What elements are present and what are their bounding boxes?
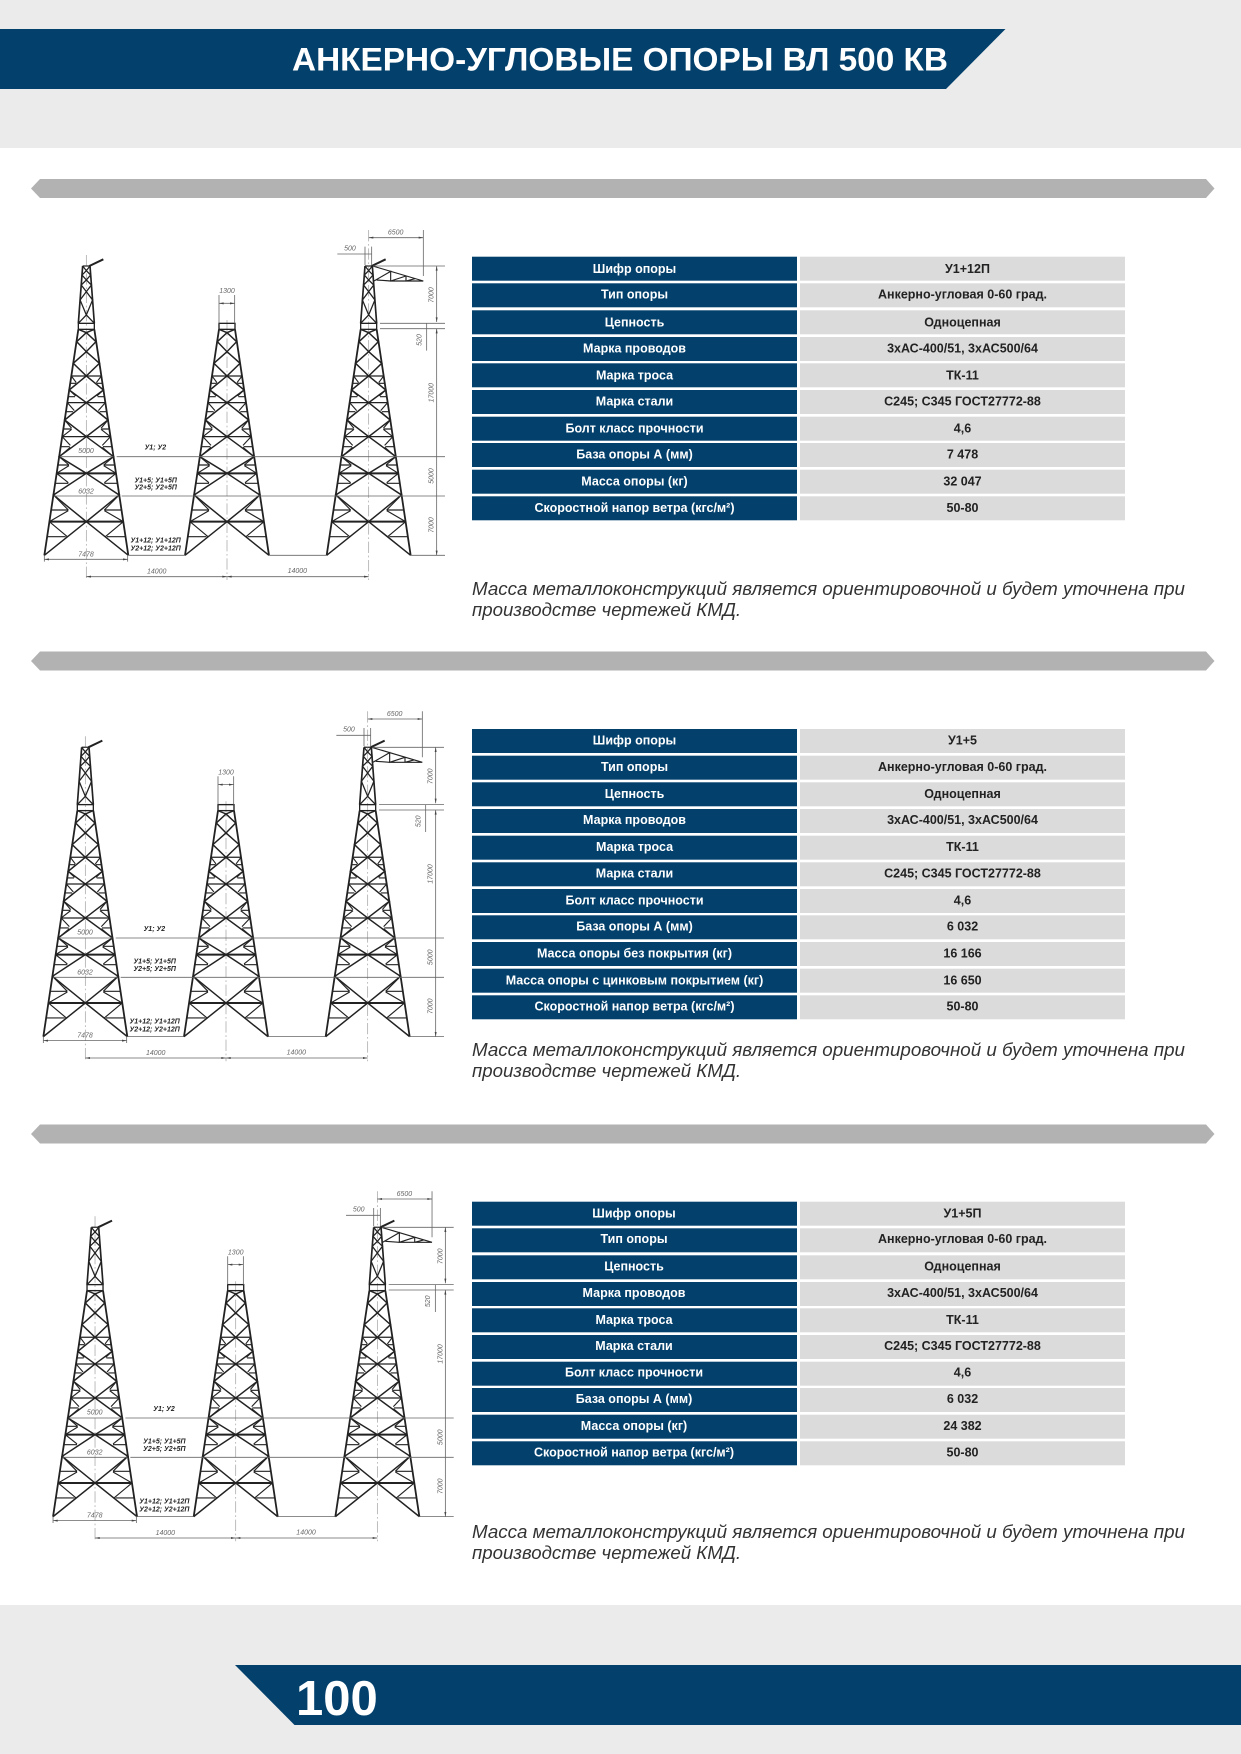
- footer band background: [0, 1605, 1241, 1754]
- tower drawing 1: 7000: [429, 287, 436, 303]
- row: Марка проводов: Марка проводов: [583, 813, 686, 827]
- row: Марка стали: Марка стали: [596, 866, 673, 880]
- tower drawing 1: У1; У2: [145, 445, 166, 452]
- title banner: [0, 29, 1006, 89]
- row: Тип опоры: Тип опоры: [601, 288, 668, 302]
- row: Марка проводов: [472, 337, 1125, 361]
- row: Скоростной напор ветра: 50-80: [947, 1000, 979, 1014]
- row: Цепность: Одноцепная: [924, 1260, 1001, 1274]
- tower drawing 2: 7478: [77, 1033, 93, 1040]
- specification table 2: [472, 729, 1125, 1019]
- tower drawing 2: У1+12; У1+12П: [130, 1019, 181, 1026]
- tower drawing 1: У2+12; У2+12П: [131, 545, 182, 552]
- tower drawing 3: 5000: [437, 1429, 444, 1445]
- tower drawing 1: [44, 230, 445, 580]
- row: Марка троса: [472, 836, 1125, 860]
- tower drawing 3: У1; У2: [153, 1406, 175, 1413]
- row: Цепность: [472, 1255, 1125, 1279]
- row: Тип опоры: Анкерно-угловая 0-60 град.: [878, 1232, 1047, 1246]
- tower drawing 1: 14000: [288, 568, 307, 575]
- row: Марка троса: ТК-11: [946, 840, 979, 854]
- tower drawing 3: 6032: [87, 1450, 103, 1457]
- panel: section 1, tower У1+12П: [31, 179, 1214, 620]
- note 1: Масса металлоконструкций является ориентировочной и будет уточнена при: [472, 578, 1185, 599]
- section divider bar 2: [31, 652, 1214, 670]
- tower drawing 1: 500: [344, 245, 356, 252]
- row: Марка стали: Марка стали: [596, 394, 673, 408]
- tower drawing 3: 5000: [87, 1409, 103, 1416]
- row: Тип опоры: [472, 756, 1125, 780]
- tower drawing 2: У1+5; У1+5П: [133, 959, 177, 966]
- tower drawing 2: 7000: [428, 768, 435, 784]
- row: Тип опоры: Тип опоры: [601, 760, 668, 774]
- row: Марка троса: ТК-11: [946, 1313, 979, 1327]
- note 1: производстве чертежей КМД.: [472, 599, 741, 620]
- row: Шифр опоры: У1+5П: [944, 1206, 981, 1220]
- row: Скоростной напор ветра: [472, 995, 1125, 1019]
- row: Скоростной напор ветра: 50-80: [947, 501, 979, 515]
- tower drawing 2: 520: [415, 815, 422, 827]
- tower drawing 2: 14000: [146, 1050, 165, 1057]
- row: Тип опоры: [472, 1228, 1125, 1252]
- tower drawing 2: 14000: [287, 1049, 306, 1056]
- row: Шифр опоры: У1+5: [948, 734, 977, 748]
- row: База опоры А: 6 032: [947, 1392, 978, 1406]
- row: Марка проводов: Марка проводов: [583, 1286, 686, 1300]
- tower drawing 2: 1300: [218, 769, 234, 776]
- row: База опоры А: База опоры А (мм): [576, 1392, 692, 1406]
- row: Марка троса: [472, 363, 1125, 387]
- row: База опоры А: [472, 443, 1125, 467]
- tower drawing 2: У2+5; У2+5П: [133, 966, 177, 973]
- row: Скоростной напор ветра: Скоростной напор ветра (кгс/м²): [534, 1000, 735, 1014]
- row: Тип опоры: Тип опоры: [600, 1232, 668, 1246]
- tower drawing 3: У2+5; У2+5П: [143, 1446, 187, 1453]
- tower drawing 1: 7000: [429, 517, 436, 533]
- row: Болт класс прочности: 4,6: [954, 421, 971, 435]
- row: Скоростной напор ветра: Скоростной напор ветра (кгс/м²): [534, 1446, 734, 1460]
- row: Шифр опоры: Шифр опоры: [593, 734, 676, 748]
- panel: section 3, tower У1+5П: [31, 1124, 1214, 1563]
- tower drawing 3: 6500: [397, 1191, 412, 1198]
- tower drawing 1: 5000: [429, 468, 436, 484]
- tower drawing 2: 6500: [387, 711, 403, 718]
- tower drawing 1: 1300: [219, 288, 235, 295]
- tower drawing 3: У1+12; У1+12П: [139, 1499, 190, 1506]
- tower drawing 3: 1300: [228, 1249, 244, 1256]
- tower drawing 3: [53, 1191, 454, 1541]
- row: Масса опоры: [472, 470, 1125, 494]
- tower drawing 2: 5000: [428, 949, 435, 965]
- row: Шифр опоры: [472, 729, 1125, 753]
- row: Марка стали: С245; С345 ГОСТ27772-88: [884, 866, 1041, 880]
- row: Цепность: Цепность: [605, 787, 665, 801]
- tower drawing 2: 17000: [428, 864, 435, 884]
- row: Масса опоры с цинковым покрытием: [472, 969, 1125, 993]
- tower drawing 1: 14000: [147, 569, 166, 576]
- row: Масса опоры с цинковым покрытием: Масса опоры с цинковым покрытием (кг): [506, 974, 763, 988]
- section divider bar 3: [31, 1124, 1214, 1144]
- tower drawing 1: У1+12; У1+12П: [131, 537, 182, 544]
- row: Марка проводов: Марка проводов: [583, 341, 686, 355]
- tower drawing 3: У1+5; У1+5П: [143, 1439, 187, 1446]
- row: База опоры А: [472, 1388, 1125, 1412]
- row: Шифр опоры: У1+12П: [945, 262, 990, 276]
- page number: 100: [296, 1672, 378, 1726]
- panel: section 2, tower У1+5: [31, 652, 1214, 1081]
- row: Шифр опоры: Шифр опоры: [593, 262, 676, 276]
- tower drawing 3: 14000: [156, 1530, 175, 1537]
- tower drawing 2: [43, 711, 444, 1061]
- row: Шифр опоры: [472, 1202, 1125, 1226]
- tower drawing 2: У1; У2: [144, 926, 165, 933]
- row: Скоростной напор ветра: Скоростной напор ветра (кгс/м²): [534, 501, 735, 515]
- row: Тип опоры: Анкерно-угловая 0-60 град.: [878, 760, 1047, 774]
- row: Марка троса: [472, 1308, 1125, 1332]
- row: Марка троса: Марка троса: [596, 840, 674, 854]
- tower drawing 1: 6032: [78, 488, 94, 495]
- tower drawing 3: 17000: [437, 1344, 444, 1364]
- tower drawing 1: 6500: [388, 230, 404, 237]
- row: Масса опоры без покрытия: [472, 942, 1125, 966]
- row: Шифр опоры: Шифр опоры: [592, 1206, 676, 1220]
- tower drawing 2: 500: [343, 727, 355, 734]
- row: Скоростной напор ветра: [472, 496, 1125, 520]
- row: Марка проводов: [472, 1282, 1125, 1306]
- row: Масса опоры: 32 047: [943, 474, 982, 488]
- row: Марка стали: [472, 1335, 1125, 1359]
- row: Масса опоры: Масса опоры (кг): [581, 474, 688, 488]
- row: Масса опоры без покрытия: Масса опоры без покрытия (кг): [537, 946, 732, 960]
- row: Цепность: Цепность: [604, 1260, 664, 1274]
- row: Скоростной напор ветра: 50-80: [947, 1446, 979, 1460]
- row: Масса опоры с цинковым покрытием: 16 650: [943, 974, 982, 988]
- row: Марка троса: Марка троса: [596, 369, 674, 383]
- row: Марка проводов: 3хАС-400/51, 3хАС500/64: [887, 341, 1038, 355]
- note 2: производстве чертежей КМД.: [472, 1060, 741, 1081]
- row: Скоростной напор ветра: [472, 1441, 1125, 1465]
- tower drawing 1: 7478: [78, 551, 94, 558]
- row: База опоры А: [472, 915, 1125, 939]
- tower drawing 2: 5000: [77, 929, 93, 936]
- row: База опоры А: 7 478: [947, 448, 978, 462]
- row: База опоры А: 6 032: [947, 920, 978, 934]
- row: Цепность: Одноцепная: [924, 787, 1001, 801]
- row: Шифр опоры: [472, 257, 1125, 281]
- specification table 3: [472, 1202, 1125, 1465]
- row: Болт класс прочности: Болт класс прочности: [565, 421, 704, 435]
- row: Болт класс прочности: [472, 889, 1125, 913]
- row: Болт класс прочности: [472, 1362, 1125, 1386]
- tower drawing 3: 7478: [87, 1513, 103, 1520]
- tower drawing 3: 7000: [437, 1248, 444, 1264]
- row: Марка проводов: 3хАС-400/51, 3хАС500/64: [887, 1286, 1038, 1300]
- title: АНКЕРНО-УГЛОВЫЕ ОПОРЫ ВЛ 500 КВ: [292, 42, 948, 78]
- row: Цепность: [472, 782, 1125, 806]
- header band background: [0, 0, 1241, 148]
- row: Масса опоры: [472, 1415, 1125, 1439]
- row: Болт класс прочности: Болт класс прочности: [565, 1366, 703, 1380]
- row: Цепность: [472, 310, 1125, 334]
- tower drawing 3: 500: [353, 1207, 365, 1214]
- footer banner with page number: [235, 1665, 1241, 1726]
- row: База опоры А: База опоры А (мм): [576, 920, 693, 934]
- tower drawing 2: 6032: [77, 970, 93, 977]
- row: Болт класс прочности: 4,6: [954, 1366, 971, 1380]
- tower drawing 1: 17000: [429, 383, 436, 402]
- row: Марка троса: Марка троса: [595, 1313, 674, 1327]
- note 3: Масса металлоконструкций является ориентировочной и будет уточнена при: [472, 1521, 1185, 1542]
- specification table 1: [472, 257, 1125, 520]
- row: База опоры А: База опоры А (мм): [576, 448, 693, 462]
- row: Цепность: Цепность: [605, 315, 665, 329]
- row: Тип опоры: Анкерно-угловая 0-60 град.: [878, 288, 1047, 302]
- tower drawing 2: У2+12; У2+12П: [130, 1027, 181, 1034]
- row: Масса опоры без покрытия: 16 166: [943, 946, 982, 960]
- tower drawing 3: 520: [425, 1295, 432, 1307]
- row: Марка проводов: [472, 809, 1125, 833]
- note 2: Масса металлоконструкций является ориентировочной и будет уточнена при: [472, 1039, 1185, 1060]
- row: Масса опоры: 24 382: [943, 1419, 982, 1433]
- tower drawing 1: У2+5; У2+5П: [134, 485, 178, 492]
- note 3: производстве чертежей КМД.: [472, 1542, 741, 1563]
- tower drawing 1: У1+5; У1+5П: [134, 477, 178, 484]
- row: Болт класс прочности: 4,6: [954, 894, 971, 908]
- row: Марка проводов: 3хАС-400/51, 3хАС500/64: [887, 813, 1038, 827]
- tower drawing 1: 520: [416, 334, 423, 346]
- tower drawing 3: 7000: [437, 1478, 444, 1494]
- row: Марка стали: Марка стали: [595, 1339, 673, 1353]
- tower drawing 3: 14000: [296, 1529, 316, 1536]
- row: Болт класс прочности: [472, 417, 1125, 441]
- tower drawing 1: 5000: [78, 448, 94, 455]
- row: Болт класс прочности: Болт класс прочности: [565, 894, 704, 908]
- tower drawing 3: У2+12; У2+12П: [139, 1507, 190, 1514]
- row: Марка стали: С245; С345 ГОСТ27772-88: [884, 1339, 1041, 1353]
- row: Тип опоры: [472, 283, 1125, 307]
- tower drawing 2: 7000: [428, 998, 435, 1014]
- row: Цепность: Одноцепная: [924, 315, 1001, 329]
- section divider bar 1: [31, 179, 1214, 198]
- row: Масса опоры: Масса опоры (кг): [581, 1419, 687, 1433]
- row: Марка троса: ТК-11: [946, 369, 979, 383]
- row: Марка стали: С245; С345 ГОСТ27772-88: [884, 394, 1041, 408]
- row: Марка стали: [472, 390, 1125, 414]
- row: Марка стали: [472, 862, 1125, 886]
